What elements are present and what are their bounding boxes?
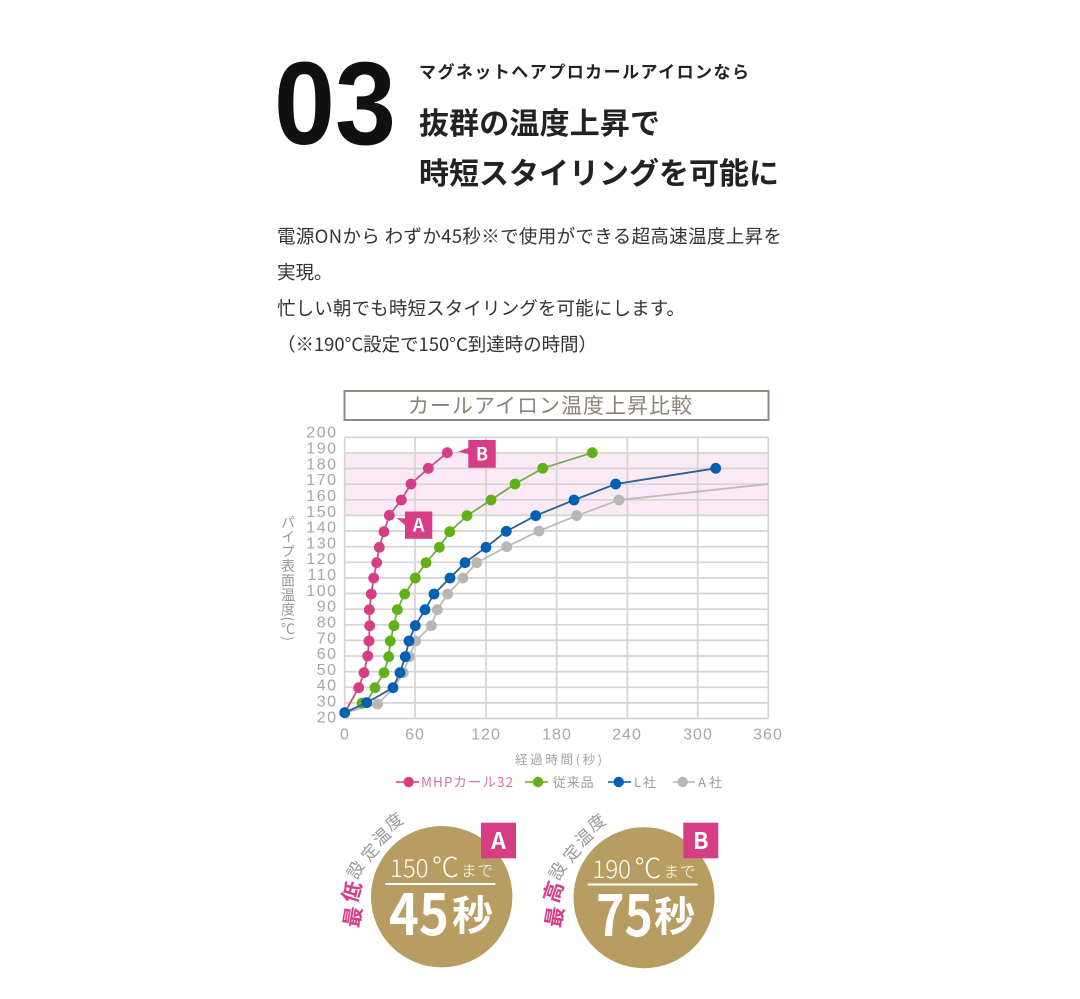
curved label: 最低設定温度: 設 bbox=[339, 856, 369, 883]
curved label: 最低設定温度: 温 bbox=[366, 821, 395, 851]
legend item: 従来品: 従来品 bbox=[553, 772, 594, 791]
y axis tick labels: 70 bbox=[317, 630, 338, 647]
45秒: 秒 bbox=[452, 882, 493, 942]
x axis tick labels: 360 bbox=[753, 726, 783, 744]
target temperature band bbox=[345, 453, 768, 515]
legend item: L社: L社 bbox=[634, 772, 656, 791]
y axis tick labels: 80 bbox=[317, 614, 338, 632]
chart title box bbox=[344, 390, 768, 420]
y axis tick labels: 130 bbox=[306, 535, 338, 552]
main heading bbox=[419, 99, 779, 193]
curved label: 最低設定温度: 最 bbox=[336, 904, 369, 930]
45秒: 45 bbox=[389, 870, 449, 952]
y axis tick labels: 190 bbox=[306, 440, 338, 458]
curved label: 最高設定温度: 定 bbox=[556, 838, 586, 867]
body text: 電源ONから わずか45秒※で使用ができる超高速温度上昇を bbox=[277, 223, 782, 249]
series: 従来品 bbox=[345, 447, 598, 713]
main heading: 時短スタイリングを可能に bbox=[419, 149, 779, 193]
curved label: 最低設定温度 bbox=[334, 805, 407, 930]
badge A: 45 seconds bbox=[334, 805, 516, 967]
x axis tick labels bbox=[340, 726, 783, 744]
eyebrow heading: マグネットヘアプロカールアイロンなら bbox=[419, 58, 749, 83]
y axis tick labels: 180 bbox=[306, 456, 338, 473]
marker B callout: B bbox=[476, 440, 488, 466]
150℃まで: 150 bbox=[390, 849, 429, 884]
45秒 bbox=[389, 870, 493, 952]
body text: 実現。 bbox=[277, 259, 333, 285]
y axis tick labels: 60 bbox=[317, 646, 338, 663]
x axis tick labels: 60 bbox=[405, 726, 425, 744]
curved label: 最高設定温度: 設 bbox=[541, 857, 571, 884]
body text bbox=[277, 223, 782, 357]
curved label: 最高設定温度: 高 bbox=[536, 877, 571, 906]
legend bbox=[396, 771, 722, 791]
y axis tick labels: 120 bbox=[306, 551, 338, 568]
y axis tick labels: 20 bbox=[317, 709, 338, 726]
y axis tick labels: 110 bbox=[307, 567, 338, 584]
y axis tick labels: 200 bbox=[306, 425, 338, 442]
y axis tick labels: 160 bbox=[306, 488, 338, 505]
series: L社 bbox=[339, 463, 721, 718]
190℃まで: ℃ bbox=[634, 847, 662, 886]
y axis tick labels: 170 bbox=[306, 472, 338, 489]
badge A: 45 seconds: A bbox=[490, 822, 506, 856]
series: MHPカール32 bbox=[345, 447, 453, 713]
legend item: 従来品 bbox=[525, 772, 594, 791]
75秒 bbox=[596, 871, 695, 953]
badge B: 75 seconds bbox=[536, 806, 718, 968]
legend item: L社 bbox=[608, 772, 656, 791]
y axis tick labels: 40 bbox=[317, 678, 338, 695]
curved label: 最高設定温度: 最 bbox=[537, 904, 571, 930]
x axis tick labels: 300 bbox=[683, 726, 713, 744]
marker B callout bbox=[458, 440, 496, 468]
y axis tick labels: 90 bbox=[317, 599, 338, 616]
x axis tick labels: 120 bbox=[471, 726, 501, 744]
150℃まで: まで bbox=[461, 859, 494, 881]
y axis tick labels: 100 bbox=[306, 583, 338, 600]
190℃まで: まで bbox=[664, 860, 697, 882]
190℃まで: 190 bbox=[592, 850, 631, 885]
y axis tick labels: 50 bbox=[317, 662, 338, 679]
curved label: 最低設定温度: 度 bbox=[379, 805, 407, 836]
curved label: 最高設定温度 bbox=[536, 806, 610, 930]
legend item: A社 bbox=[673, 772, 722, 791]
line chart bbox=[278, 425, 783, 768]
x axis tick labels: 180 bbox=[542, 726, 572, 744]
badge B: 75 seconds: B bbox=[693, 822, 709, 856]
150℃まで: ℃ bbox=[432, 846, 459, 885]
y axis tick labels bbox=[306, 425, 338, 726]
body text: 忙しい朝でも時短スタイリングを可能にします。 bbox=[277, 295, 685, 321]
curved label: 最低設定温度: 低 bbox=[334, 877, 369, 906]
legend item: MHPカール32: MHPカール32 bbox=[421, 771, 513, 791]
marker A callout bbox=[397, 512, 432, 539]
body text: （※190°C設定で150°C到達時の時間） bbox=[277, 331, 597, 357]
marker A callout: A bbox=[412, 512, 425, 538]
x axis tick labels: 0 bbox=[340, 726, 350, 744]
75秒: 75 bbox=[596, 871, 653, 953]
curved label: 最高設定温度: 温 bbox=[568, 822, 598, 852]
x axis title: 経過時間(秒) bbox=[515, 749, 602, 768]
chart title box: カールアイロン温度上昇比較 bbox=[408, 390, 692, 420]
75秒: 秒 bbox=[654, 883, 695, 943]
x axis tick labels: 240 bbox=[612, 726, 642, 744]
y axis tick labels: 30 bbox=[317, 694, 338, 710]
y axis title: パイプ表面温度(℃) bbox=[278, 515, 298, 641]
main heading: 抜群の温度上昇で bbox=[419, 99, 660, 143]
y axis tick labels: 140 bbox=[306, 520, 338, 537]
legend item: A社: A社 bbox=[698, 772, 722, 791]
y axis tick labels: 150 bbox=[306, 504, 338, 521]
section number: 03 bbox=[274, 38, 396, 170]
curved label: 最高設定温度: 度 bbox=[582, 806, 610, 837]
series: A社 bbox=[345, 484, 768, 713]
curved label: 最低設定温度: 定 bbox=[354, 837, 384, 866]
